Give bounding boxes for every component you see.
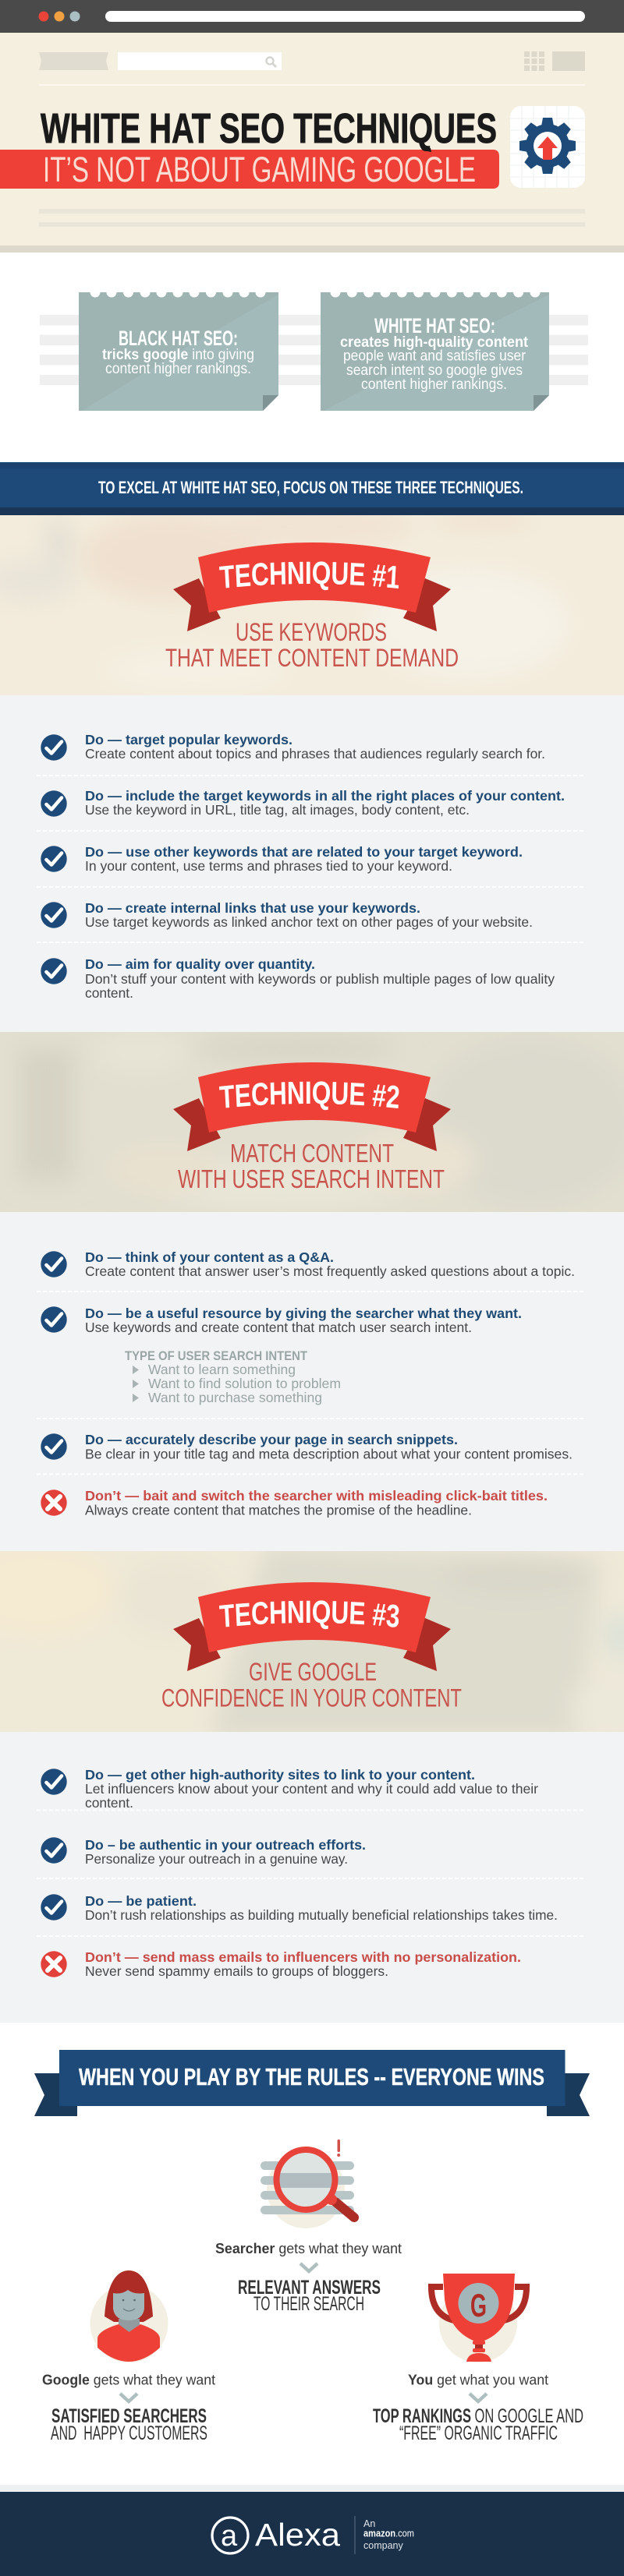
icon: trophy: G bbox=[470, 2287, 487, 2323]
item: mass email warning bbox=[41, 1949, 521, 1979]
icon: gear with up arrow bbox=[510, 106, 585, 188]
item: include target keywords: Do — include the target keywords in all the right places of your content. bbox=[85, 788, 565, 804]
blue intro band bbox=[0, 462, 624, 515]
browser toolbar bbox=[0, 0, 624, 33]
searcher outcome bbox=[215, 2140, 402, 2315]
list: types of user search intent: Want to find solution to problem bbox=[148, 1376, 341, 1391]
card: white hat SEO: content higher rankings. bbox=[361, 376, 507, 393]
item: search snippets: Be clear in your title tag and meta description about what your content promises. bbox=[85, 1447, 573, 1462]
logo: Alexa: Alexa bbox=[255, 2517, 340, 2553]
item: target popular keywords: Do — target popular keywords. bbox=[85, 732, 292, 747]
logo: Alexa: a bbox=[221, 2520, 238, 2553]
item: be patient: Don’t rush relationships as building mutually beneficial relationships takes time. bbox=[85, 1907, 558, 1923]
ribbon: technique 1 bbox=[173, 542, 451, 631]
item: authority links bbox=[41, 1767, 538, 1811]
photo: tablet analytics bbox=[0, 1543, 624, 1738]
item: click-bait warning: Don’t — bait and switch the searcher with misleading click-bait titles. bbox=[85, 1488, 548, 1504]
item: mass email warning: Don’t — send mass emails to influencers with no personalization. bbox=[85, 1949, 521, 1965]
list: types of user search intent: TYPE OF USER SEARCH INTENT bbox=[125, 1348, 308, 1363]
caption: searcher: RELEVANT ANSWERS bbox=[238, 2277, 381, 2299]
card: white hat SEO: people want and satisfies user bbox=[343, 348, 526, 365]
subtitle: technique 1 bbox=[165, 618, 459, 672]
logo: Alexa bbox=[212, 2516, 414, 2554]
card: white hat SEO bbox=[321, 287, 549, 411]
item: include target keywords bbox=[41, 788, 565, 818]
item: related keywords: In your content, use terms and phrases tied to your keyword. bbox=[85, 858, 452, 874]
subtitle: technique 1: THAT MEET CONTENT DEMAND bbox=[165, 644, 459, 672]
item: useful resource: Use keywords and create content that match user search intent. bbox=[85, 1320, 472, 1335]
technique 1 hero bbox=[0, 515, 624, 695]
ribbon: technique 2: TECHNIQUE #2 bbox=[218, 1081, 399, 1110]
item: mass email warning: Never send spammy emails to groups of bloggers. bbox=[85, 1963, 388, 1979]
item: useful resource bbox=[41, 1306, 522, 1335]
subtitle: technique 3 bbox=[161, 1658, 462, 1712]
item: authority links: Let influencers know about your content and why it could add value to their bbox=[85, 1781, 538, 1797]
card: black hat SEO: tricks google into giving bbox=[102, 347, 254, 363]
card: white hat SEO: WHITE HAT SEO: bbox=[374, 314, 495, 337]
subtitle: technique 3: CONFIDENCE IN YOUR CONTENT bbox=[161, 1684, 462, 1712]
card: black hat SEO: BLACK HAT SEO: bbox=[119, 327, 238, 350]
technique 3 hero bbox=[0, 1551, 624, 1732]
icon: magnifier over results bbox=[261, 2140, 354, 2228]
search bar row bbox=[39, 51, 585, 86]
caption: Google: Google gets what they want bbox=[42, 2371, 215, 2388]
card: white hat SEO: creates high-quality content bbox=[340, 334, 529, 351]
photo: hands on laptop bbox=[0, 1031, 624, 1212]
item: useful resource: Do — be a useful resource by giving the searcher what they want. bbox=[85, 1306, 522, 1321]
item: internal links bbox=[41, 900, 533, 930]
logo: Alexa: company bbox=[363, 2540, 403, 2551]
item: search snippets bbox=[41, 1432, 573, 1462]
site-owner outcome bbox=[373, 2274, 583, 2444]
ribbon: technique 2 bbox=[173, 1062, 451, 1151]
list: types of user search intent: Want to purchase something bbox=[148, 1390, 322, 1405]
item: quality over quantity: Do — aim for quality over quantity. bbox=[85, 956, 315, 972]
technique 3 list bbox=[0, 1732, 624, 2023]
item: search snippets: Do — accurately describe your page in search snippets. bbox=[85, 1432, 458, 1447]
logo: Alexa: amazon.com bbox=[363, 2527, 414, 2539]
item: authority links: Do — get other high-authority sites to link to your content. bbox=[85, 1767, 475, 1783]
subtitle bar: IT’S NOT ABOUT GAMING GOOGLE bbox=[43, 150, 476, 189]
item: authentic outreach: Personalize your outreach in a genuine way. bbox=[85, 1851, 348, 1867]
subtitle: technique 2: MATCH CONTENT bbox=[230, 1139, 394, 1168]
card: black hat SEO: content higher rankings. bbox=[105, 361, 251, 377]
item: Q and A: Create content that answer user’s most frequently asked questions about a topic. bbox=[85, 1263, 575, 1279]
item: internal links: Use target keywords as linked anchor text on other pages of your website. bbox=[85, 914, 533, 930]
card: black hat SEO bbox=[79, 287, 278, 411]
item: authentic outreach: Do – be authentic in your outreach efforts. bbox=[85, 1837, 366, 1853]
item: related keywords: Do — use other keywords that are related to your target keyword. bbox=[85, 844, 523, 860]
item: quality over quantity: Don’t stuff your content with keywords or publish multiple pages of low quality bbox=[85, 971, 555, 987]
ribbon: technique 3: TECHNIQUE #3 bbox=[218, 1600, 399, 1629]
subtitle: technique 3: GIVE GOOGLE bbox=[249, 1658, 377, 1686]
item: be patient: Do — be patient. bbox=[85, 1893, 197, 1909]
item: target popular keywords: Create content about topics and phrases that audiences regularly search for. bbox=[85, 746, 545, 761]
item: Q and A bbox=[41, 1249, 575, 1279]
caption: you bbox=[373, 2371, 583, 2444]
browser-window header bbox=[0, 0, 624, 253]
item: include target keywords: Use the keyword in URL, title tag, alt images, body content, etc. bbox=[85, 802, 470, 818]
subtitle: technique 1: USE KEYWORDS bbox=[236, 618, 387, 646]
item: click-bait warning: Always create content that matches the promise of the headline. bbox=[85, 1503, 472, 1518]
item: authority links: content. bbox=[85, 1795, 133, 1811]
caption: Google: AND HAPPY CUSTOMERS bbox=[51, 2422, 207, 2444]
caption: Google bbox=[42, 2371, 215, 2444]
footer bbox=[0, 2485, 624, 2576]
technique 1 list bbox=[0, 695, 624, 1032]
caption: Google: SATISFIED SEARCHERS bbox=[51, 2405, 207, 2427]
item: click-bait warning bbox=[41, 1488, 548, 1518]
item: quality over quantity bbox=[41, 956, 555, 1001]
caption: searcher: Searcher gets what they want bbox=[215, 2240, 402, 2256]
caption: searcher: TO THEIR SEARCH bbox=[254, 2293, 364, 2315]
item: target popular keywords bbox=[41, 732, 545, 761]
technique 2 list bbox=[0, 1212, 624, 1551]
caption: searcher bbox=[215, 2240, 402, 2315]
ribbon: technique 3 bbox=[173, 1582, 451, 1671]
item: authentic outreach bbox=[41, 1837, 366, 1867]
subtitle: technique 2: WITH USER SEARCH INTENT bbox=[178, 1164, 445, 1193]
ribbon: technique 1: TECHNIQUE #1 bbox=[218, 561, 399, 591]
item: be patient bbox=[41, 1893, 558, 1923]
banner: everyone wins bbox=[34, 2050, 590, 2116]
caption: you: You get what you want bbox=[408, 2371, 548, 2388]
photo: hands on keyboard bbox=[0, 504, 624, 695]
Google outcome bbox=[42, 2270, 215, 2444]
technique 2 hero bbox=[0, 1032, 624, 1212]
item: Q and A: Do — think of your content as a Q&A. bbox=[85, 1249, 334, 1265]
card: white hat SEO: search intent so google gives bbox=[346, 362, 523, 379]
item: related keywords bbox=[41, 844, 523, 874]
subtitle: technique 2 bbox=[178, 1139, 445, 1193]
logo: Alexa: An bbox=[363, 2518, 375, 2529]
icon: trophy bbox=[431, 2274, 526, 2362]
list: types of user search intent bbox=[125, 1348, 341, 1405]
item: internal links: Do — create internal links that use your keywords. bbox=[85, 900, 420, 916]
list: types of user search intent: Want to learn something bbox=[148, 1362, 296, 1377]
item: quality over quantity: content. bbox=[85, 985, 133, 1001]
icon: woman avatar bbox=[90, 2270, 168, 2362]
definitions panel bbox=[40, 287, 588, 411]
